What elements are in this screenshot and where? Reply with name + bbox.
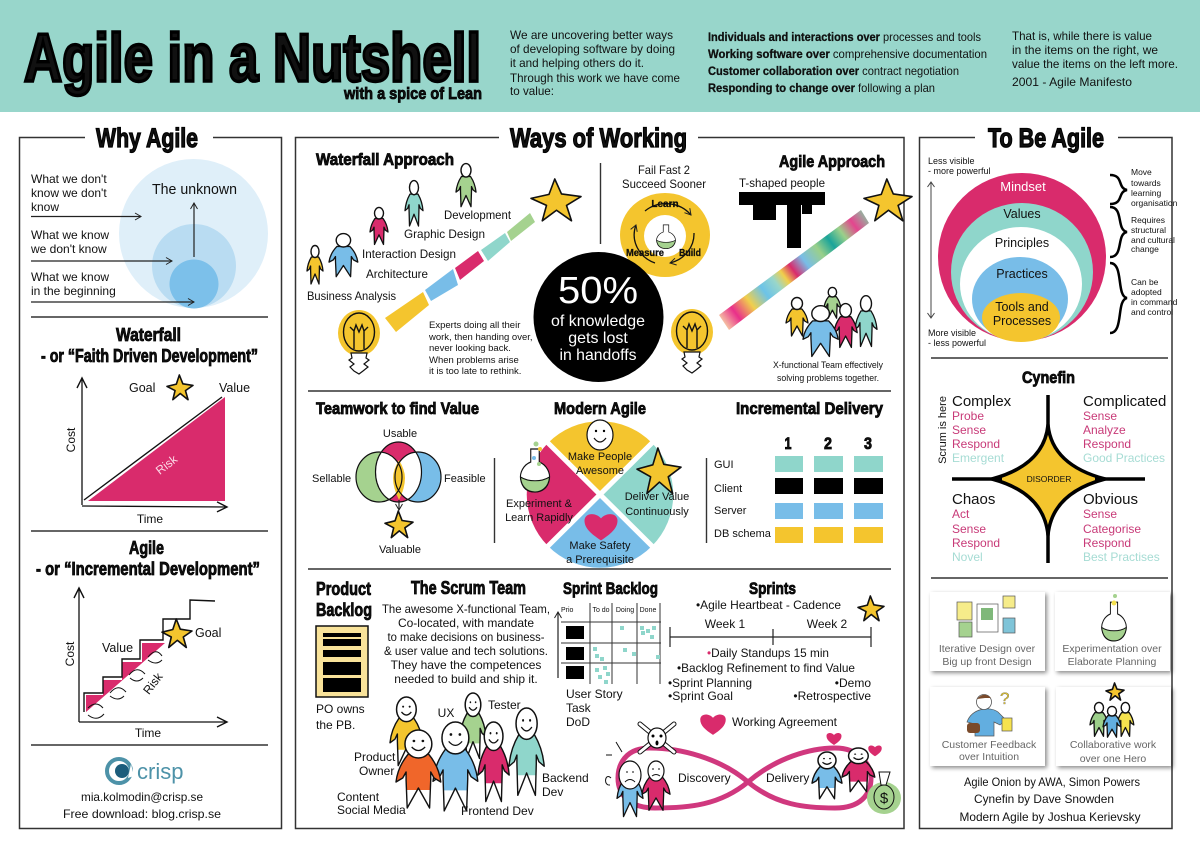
credits: Agile Onion by AWA, Simon Powers xyxy=(964,775,1140,789)
waterfall note: When problems arise xyxy=(429,355,519,366)
waterfall approach: Architecture xyxy=(366,267,428,281)
agile onion: Requires xyxy=(1131,215,1165,225)
agile onion: Mindset xyxy=(1000,179,1046,194)
icon: t-shape xyxy=(739,192,825,248)
product backlog: Backlog xyxy=(316,600,372,620)
incremental delivery grid: Client xyxy=(714,483,742,495)
cynefin framework: Sense xyxy=(1083,409,1117,423)
manifesto intro xyxy=(510,28,680,98)
scrum team: Social Media xyxy=(337,803,406,817)
sprints timeline: •Sprint Planning xyxy=(668,676,752,690)
sprint backlog board: Sprint Backlog xyxy=(563,579,658,598)
agile approach: Agile Approach xyxy=(779,152,885,171)
unknown circles diagram: What we know xyxy=(31,228,109,242)
cynefin framework: Act xyxy=(952,507,970,521)
chart: agile cost over time: Risk xyxy=(140,669,166,697)
50 percent callout: in handoffs xyxy=(560,347,636,364)
braces xyxy=(1110,175,1127,333)
sprints timeline: •Retrospective xyxy=(793,689,871,703)
icon: money bag xyxy=(867,772,901,814)
working agreement loop: Delivery xyxy=(766,771,809,785)
scrum team description xyxy=(382,602,550,686)
cynefin framework: Respond xyxy=(952,536,1000,550)
sprints timeline: Week 2 xyxy=(807,617,848,631)
icon: skull xyxy=(640,724,674,752)
heading: agile: Agile xyxy=(129,538,164,558)
waterfall approach: Interaction Design xyxy=(362,247,456,261)
sprint backlog board: Task xyxy=(566,701,592,715)
working agreement loop xyxy=(606,715,901,817)
x-functional team xyxy=(786,287,877,356)
build measure learn cycle: Learn xyxy=(651,199,679,210)
subtitle: with a spice of Lean xyxy=(343,84,482,103)
agile onion: More visible xyxy=(928,328,976,338)
modern agile wheel: Make People xyxy=(568,451,632,463)
scrum team: Dev xyxy=(542,785,563,799)
waterfall approach: Waterfall Approach xyxy=(316,150,454,169)
card: customer feedback xyxy=(930,687,1045,766)
manifesto values xyxy=(708,30,987,95)
waterfall note: never looking back. xyxy=(429,343,511,354)
heading: waterfall xyxy=(41,325,258,366)
sprints timeline: Week 1 xyxy=(705,617,746,631)
teamwork venn diagram: Usable xyxy=(383,428,417,440)
waterfall approach: Business Analysis xyxy=(307,289,396,303)
product backlog xyxy=(316,579,372,732)
cynefin framework: Novel xyxy=(952,550,983,564)
sprint backlog board xyxy=(558,579,661,729)
modern agile wheel: Deliver Value xyxy=(625,491,689,503)
sprints timeline: •Agile Heartbeat - Cadence xyxy=(696,598,841,612)
icon: money bag: $ xyxy=(880,790,889,807)
modern agile wheel: Learn Rapidly xyxy=(505,512,573,524)
agile onion: structural xyxy=(1131,225,1166,235)
build measure learn cycle xyxy=(620,163,710,277)
chart: waterfall cost over time: Value xyxy=(219,381,250,395)
scrum team: Tester xyxy=(488,698,521,712)
scrum team description: They have the competences xyxy=(391,658,541,672)
cynefin framework: Sense xyxy=(952,522,986,536)
chart: agile cost over time: Cost xyxy=(63,641,77,666)
panel: to be agile xyxy=(920,123,1178,828)
card: customer feedback: Customer Feedback xyxy=(942,739,1037,751)
build measure learn cycle: Measure xyxy=(626,248,664,259)
credits xyxy=(960,775,1140,824)
waterfall approach: Graphic Design xyxy=(404,227,485,241)
chart: waterfall cost over time: Goal xyxy=(129,381,155,395)
icon: smiley xyxy=(587,420,613,450)
cynefin framework: Respond xyxy=(952,437,1000,451)
incremental delivery grid: Incremental Delivery xyxy=(736,399,883,418)
agile onion: - less powerful xyxy=(928,338,986,348)
build measure learn cycle: Fail Fast 2 xyxy=(638,163,690,177)
cynefin framework: Respond xyxy=(1083,536,1131,550)
agile onion: and control xyxy=(1131,307,1173,317)
chart: agile cost over time xyxy=(63,588,227,740)
scrum team description: Co-located, with mandate xyxy=(398,616,534,630)
cynefin framework: Emergent xyxy=(952,451,1005,465)
agile onion: Processes xyxy=(993,314,1051,328)
contact xyxy=(63,790,221,821)
agile onion: Principles xyxy=(995,236,1049,250)
agile onion: Less visible xyxy=(928,156,975,166)
chart: agile cost over time: Goal xyxy=(195,626,221,640)
chart: waterfall cost over time xyxy=(64,375,250,526)
agile onion: learning xyxy=(1131,188,1162,198)
sprint backlog board: DoD xyxy=(566,715,590,729)
heading: to be agile: To Be Agile xyxy=(988,123,1104,153)
card: collaborative work: Collaborative work xyxy=(1070,739,1157,751)
sprints timeline: Sprints xyxy=(749,579,796,598)
cynefin framework: Analyze xyxy=(1083,423,1126,437)
scrum team description: needed to build and ship it. xyxy=(394,672,538,686)
sprint backlog board: Done xyxy=(640,607,656,614)
manifesto intro: Through this work we have come xyxy=(510,71,680,85)
people: delivery xyxy=(812,733,882,799)
card: experimentation: Experimentation over xyxy=(1062,643,1162,655)
manifesto intro: it and helping others do it. xyxy=(510,56,644,70)
contact: mia.kolmodin@crisp.se xyxy=(81,790,203,804)
chart: agile cost over time: Time xyxy=(135,726,161,740)
heading: why agile: Why Agile xyxy=(96,123,198,153)
manifesto intro: of developing software by doing xyxy=(510,42,675,56)
product backlog: the PB. xyxy=(316,718,355,732)
teamwork venn diagram: Feasible xyxy=(444,473,486,485)
sprints timeline: •Sprint Goal xyxy=(668,689,733,703)
product backlog: Product xyxy=(316,579,371,599)
cynefin framework: Good Practices xyxy=(1083,451,1165,465)
build measure learn cycle: Build xyxy=(679,248,701,259)
card: experimentation xyxy=(1055,592,1170,671)
manifesto values: Individuals and interactions over processes and tools xyxy=(708,30,981,44)
chart: waterfall cost over time: Cost xyxy=(64,427,78,452)
sprints timeline xyxy=(668,579,884,703)
manifesto closing xyxy=(1012,29,1178,89)
scrum team: Owner xyxy=(359,764,394,778)
cynefin framework: Complex xyxy=(952,393,1012,410)
waterfall approach: Development xyxy=(444,208,512,222)
unknown circles diagram: in the beginning xyxy=(31,284,116,298)
cynefin framework: Obvious xyxy=(1083,491,1138,508)
modern agile wheel: Modern Agile xyxy=(554,399,646,418)
scrum team: Frontend Dev xyxy=(461,804,534,818)
unknown circles diagram: know we don't xyxy=(31,186,107,200)
agile onion: Can be xyxy=(1131,277,1159,287)
card: customer feedback: over Intuition xyxy=(959,751,1019,763)
build measure learn cycle: Succeed Sooner xyxy=(622,177,706,191)
manifesto closing: in the items on the right, we xyxy=(1012,43,1158,57)
agile approach: X-functional Team effectively xyxy=(773,360,883,371)
agile onion: - more powerful xyxy=(928,166,991,176)
panel: why agile xyxy=(20,123,282,828)
modern agile wheel: Continuously xyxy=(625,506,689,518)
heading: waterfall: - or “Faith Driven Development” xyxy=(41,346,258,366)
card: iterative design xyxy=(930,592,1045,671)
scrum team: The Scrum Team xyxy=(411,578,526,598)
heading: agile xyxy=(36,538,260,579)
sprint backlog board: User Story xyxy=(566,687,623,701)
handoff bar segments xyxy=(385,213,535,332)
agile onion xyxy=(928,156,1178,348)
waterfall approach xyxy=(307,150,581,377)
cynefin framework: Sense xyxy=(1083,507,1117,521)
infinity loop xyxy=(618,748,871,808)
incremental delivery grid: GUI xyxy=(714,459,734,471)
cynefin framework: Categorise xyxy=(1083,522,1141,536)
crisp logo xyxy=(107,759,183,784)
unknown circles diagram: The unknown xyxy=(152,181,237,198)
scrum team people xyxy=(390,693,544,811)
agile approach xyxy=(671,152,912,384)
incremental delivery grid: Server xyxy=(714,505,747,517)
50 percent callout xyxy=(534,252,664,382)
sprints timeline: •Demo xyxy=(835,676,871,690)
working agreement loop: Working Agreement xyxy=(732,715,838,729)
chart: agile cost over time: Value xyxy=(102,641,133,655)
waterfall note: Experts doing all their xyxy=(429,320,520,331)
manifesto intro: to value: xyxy=(510,84,554,98)
agile onion: Tools and xyxy=(995,300,1049,314)
icon: flask xyxy=(520,442,550,492)
incremental delivery grid xyxy=(706,399,883,543)
incremental delivery grid: 3 xyxy=(864,434,872,453)
agile onion: in command xyxy=(1131,297,1178,307)
agile approach: solving problems together. xyxy=(777,373,879,384)
header banner xyxy=(0,0,1200,112)
scrum team: Content xyxy=(337,790,380,804)
scrum team description: The awesome X-functional Team, xyxy=(382,602,550,616)
teamwork venn diagram xyxy=(312,399,486,556)
waterfall note: work, then handing over, xyxy=(428,332,533,343)
rainbow bar xyxy=(719,210,869,330)
heading: waterfall: Waterfall xyxy=(116,325,181,345)
50 percent callout: gets lost xyxy=(568,330,628,347)
modern agile wheel: Make Safety xyxy=(569,540,631,552)
heading: agile: - or “Incremental Development” xyxy=(36,559,260,579)
card: experimentation: Elaborate Planning xyxy=(1068,656,1157,668)
working agreement loop: Discovery xyxy=(678,771,731,785)
50 percent callout: of knowledge xyxy=(551,313,645,330)
cynefin cross: DISORDER xyxy=(1027,474,1071,484)
agile onion: Values xyxy=(1003,207,1041,221)
sprint backlog board: Doing xyxy=(616,607,634,614)
incremental delivery grid: 2 xyxy=(824,434,832,453)
manifesto values: Working software over comprehensive documentation xyxy=(708,47,987,61)
scrum team: Product xyxy=(354,750,396,764)
scrum team: Backend xyxy=(542,771,589,785)
cynefin framework: Respond xyxy=(1083,437,1131,451)
card: iterative design: Iterative Design over xyxy=(939,643,1036,655)
modern agile wheel: Awesome xyxy=(576,465,624,477)
cynefin cross xyxy=(952,395,1145,563)
card: collaborative work xyxy=(1056,683,1171,766)
agile onion: towards xyxy=(1131,178,1161,188)
unknown circles diagram xyxy=(30,159,268,308)
cynefin framework xyxy=(937,368,1166,564)
credits: Cynefin by Dave Snowden xyxy=(974,792,1114,806)
agile onion: adopted xyxy=(1131,287,1162,297)
sprints timeline: •Backlog Refinement to find Value xyxy=(677,661,855,675)
sprint backlog board: To do xyxy=(592,607,610,614)
cynefin framework: Best Practises xyxy=(1083,550,1160,564)
waterfall note: it is too late to rethink. xyxy=(429,366,521,377)
modern agile wheel xyxy=(505,399,689,568)
credits: Modern Agile by Joshua Kerievsky xyxy=(960,810,1140,824)
manifesto closing: 2001 - Agile Manifesto xyxy=(1012,75,1132,89)
cynefin framework: Cynefin xyxy=(1022,368,1075,387)
modern agile wheel: Experiment & xyxy=(506,498,573,510)
manifesto intro: We are uncovering better ways xyxy=(510,28,673,42)
unknown circles diagram: we don't know xyxy=(30,242,107,256)
manifesto closing: value the items on the left more. xyxy=(1012,57,1178,71)
unknown circles diagram: What we know xyxy=(31,270,109,284)
crisp logo: crisp xyxy=(137,759,183,784)
product backlog: PO owns xyxy=(316,702,365,716)
incremental delivery grid: 1 xyxy=(784,434,792,453)
people: discovery xyxy=(606,742,670,817)
agile onion: Practices xyxy=(996,267,1048,281)
cynefin framework: Chaos xyxy=(952,491,995,508)
cynefin framework: Probe xyxy=(952,409,984,423)
chart: waterfall cost over time: Time xyxy=(137,512,163,526)
teamwork venn diagram: Sellable xyxy=(312,473,351,485)
sprints timeline: •Daily Standups 15 min xyxy=(707,646,829,660)
50 percent callout: 50% xyxy=(558,270,638,312)
unknown circles diagram: know xyxy=(31,200,59,214)
card: collaborative work: over one Hero xyxy=(1080,753,1146,765)
cynefin framework: Complicated xyxy=(1083,393,1166,410)
waterfall note xyxy=(428,320,533,377)
unknown circles diagram: What we don't xyxy=(31,172,107,186)
title: Agile in a Nutshell xyxy=(24,20,481,96)
cynefin framework: Scrum is here xyxy=(937,396,949,464)
card: iterative design: Big up front Design xyxy=(942,656,1032,668)
scrum team description: to make decisions on business- xyxy=(388,630,545,644)
incremental delivery grid: DB schema xyxy=(714,528,772,540)
card: customer feedback: ? xyxy=(1000,689,1009,708)
modern agile wheel: a Prerequisite xyxy=(566,554,634,566)
contact: Free download: blog.crisp.se xyxy=(63,807,221,821)
waterfall people xyxy=(307,164,476,284)
chart: waterfall cost over time: Risk xyxy=(153,452,181,478)
teamwork venn diagram: Teamwork to find Value xyxy=(316,399,479,418)
scrum team: UX xyxy=(438,706,454,720)
scrum team xyxy=(337,578,589,818)
agile onion: change xyxy=(1131,244,1159,254)
manifesto values: Customer collaboration over contract negotiation xyxy=(708,64,959,78)
panel: ways of working xyxy=(296,123,912,828)
manifesto values: Responding to change over following a plan xyxy=(708,81,935,95)
agile onion: and cultural xyxy=(1131,235,1175,245)
heading: ways of working: Ways of Working xyxy=(510,123,687,153)
scrum team description: & user value and tech solutions. xyxy=(384,644,548,658)
manifesto closing: That is, while there is value xyxy=(1012,29,1152,43)
agile approach: T-shaped people xyxy=(739,176,825,190)
agile onion: organisation xyxy=(1131,198,1178,208)
agile onion: Move xyxy=(1131,167,1152,177)
sprint backlog board: Prio xyxy=(561,607,574,614)
cynefin framework: Sense xyxy=(952,423,986,437)
teamwork venn diagram: Valuable xyxy=(379,544,421,556)
